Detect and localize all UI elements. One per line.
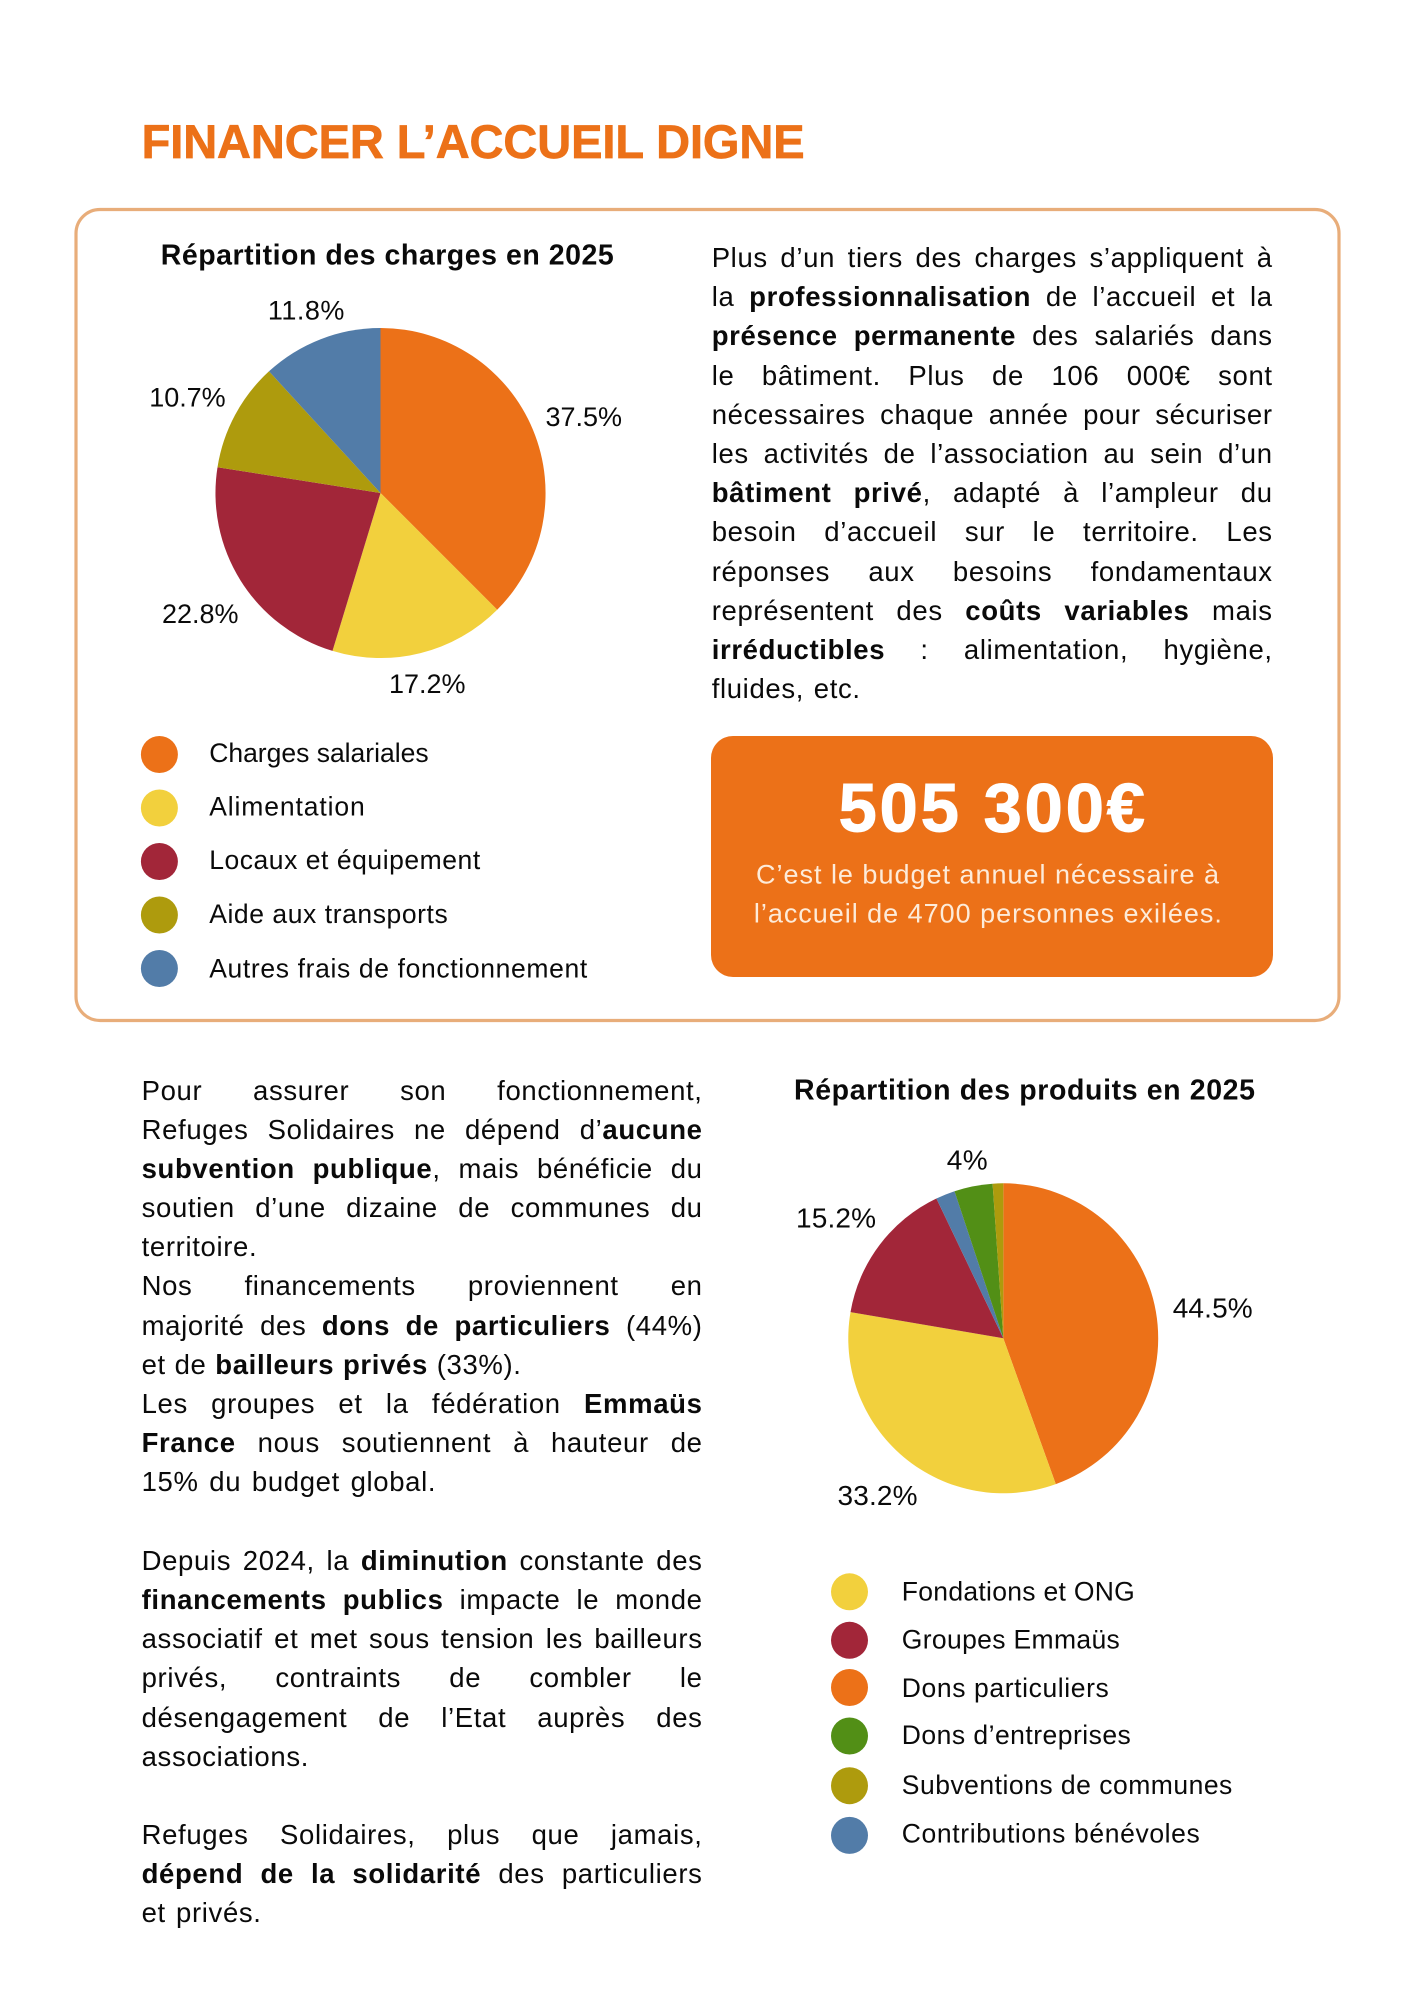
panel: charges frame: [76, 210, 1339, 1020]
legend text: dons d'entreprises: Dons d’entreprises: [902, 1720, 1131, 1750]
pie labels: charges: [149, 296, 622, 699]
text block: funding explanation: [142, 1074, 703, 1928]
slice: charges salariales 37.5%: [380, 328, 546, 610]
text block: funding explanation: 15% du budget global.: [142, 1466, 436, 1497]
text block: charges explanation: représentent des coûts variables mais: [712, 595, 1273, 626]
swatch: charges salariales: [141, 736, 178, 773]
text block: funding explanation: majorité des dons de particuliers (44%): [142, 1310, 703, 1341]
label 33.2%: 33.2%: [838, 1480, 918, 1511]
legend text: charges salariales: Charges salariales: [209, 738, 429, 768]
swatch: aide aux transports: [141, 896, 178, 934]
label 11.8%: 11.8%: [268, 296, 344, 326]
legend text: locaux et équipement: Locaux et équipement: [209, 845, 481, 875]
slice: dons particuliers 44.5%: [1003, 1183, 1158, 1484]
legend text: groupes Emmaüs: Groupes Emmaüs: [902, 1625, 1120, 1655]
text block: charges explanation: [712, 242, 1273, 704]
label 44.5%: 44.5%: [1173, 1292, 1253, 1323]
title: FINANCER L’ACCUEIL DIGNE: [142, 115, 805, 168]
swatch: dons particuliers: [831, 1669, 868, 1706]
text block: charges explanation: bâtiment privé, adapté à l’ampleur du: [712, 477, 1273, 508]
swatch: fondations et ONG: [831, 1573, 868, 1610]
slice: alimentation 17.2%: [332, 493, 497, 658]
slice: fondations et ONG 33.2%: [848, 1312, 1056, 1493]
text block: funding explanation: Les groupes et la fédération Emmaüs: [142, 1388, 703, 1419]
slice: locaux et équipement 22.8%: [215, 467, 380, 651]
text block: charges explanation: nécessaires chaque année pour sécuriser: [712, 399, 1273, 430]
text block: charges explanation: présence permanente des salariés dans: [712, 320, 1273, 351]
label 10.7%: 10.7%: [149, 382, 226, 412]
text block: funding explanation: Refuges Solidaires ne dépend d’aucune: [142, 1114, 703, 1145]
label 15.2%: 15.2%: [796, 1203, 876, 1234]
legend text: alimentation: Alimentation: [209, 792, 365, 822]
text block: charges explanation: Plus d’un tiers des charges s’appliquent à: [712, 242, 1273, 273]
label 17.2%: 17.2%: [389, 669, 466, 699]
text block: charges explanation: les activités de l’association au sein d’un: [712, 438, 1273, 469]
label 22.8%: 22.8%: [162, 599, 238, 629]
swatch: contributions bénévoles: [831, 1817, 868, 1854]
text block: funding explanation: soutien d’une dizaine de communes du: [142, 1192, 703, 1223]
legend text: dons particuliers: Dons particuliers: [902, 1673, 1109, 1703]
swatch: subventions de communes: [831, 1767, 868, 1804]
text block: funding explanation: France nous soutiennent à hauteur de: [142, 1427, 703, 1458]
text block: charges explanation: irréductibles : alimentation, hygiène,: [712, 634, 1273, 665]
swatch: alimentation: [141, 790, 178, 826]
text block: funding explanation: Nos financements proviennent en: [142, 1270, 703, 1301]
pie chart: produits: [848, 1183, 1158, 1493]
text block: funding explanation: Refuges Solidaires, plus que jamais,: [142, 1819, 703, 1850]
heading: produits chart: Répartition des produits en 2025: [794, 1074, 1255, 1106]
legend: charges: [141, 736, 588, 987]
callout background: [711, 736, 1273, 977]
pie labels: produits: [796, 1144, 1253, 1511]
text block: funding explanation: associatif et met sous tension les bailleurs: [142, 1623, 703, 1654]
slice: contributions bénévoles: [936, 1191, 1003, 1338]
text block: funding explanation: et privés.: [142, 1897, 262, 1928]
legend text: autres frais: Autres frais de fonctionnement: [209, 954, 588, 984]
legend: produits: [831, 1573, 1232, 1854]
text block: funding explanation: associations.: [142, 1741, 309, 1772]
text block: funding explanation: subvention publique, mais bénéficie du: [142, 1153, 703, 1184]
swatch: locaux et équipement: [141, 843, 178, 880]
slice: subventions de communes: [993, 1183, 1003, 1338]
slice: dons d'entreprises 4%: [954, 1184, 1003, 1338]
text block: funding explanation: dépend de la solidarité des particuliers: [142, 1858, 703, 1889]
big number: 505 300€: [838, 770, 1145, 846]
callout text line 1: C’est le budget annuel nécessaire à: [756, 860, 1220, 890]
text block: charges explanation: réponses aux besoins fondamentaux: [712, 556, 1273, 586]
legend text: subventions de communes: Subventions de communes: [902, 1770, 1232, 1800]
text block: charges explanation: la professionnalisation de l’accueil et la: [712, 281, 1273, 312]
text block: funding explanation: financements publics impacte le monde: [142, 1584, 703, 1615]
text block: funding explanation: privés, contraints de combler le: [142, 1662, 703, 1693]
slice: aide aux transports 10.7%: [218, 371, 380, 493]
swatch: groupes Emmaüs: [831, 1622, 868, 1659]
label 37.5%: 37.5%: [546, 402, 622, 432]
text block: charges explanation: besoin d’accueil sur le territoire. Les: [712, 516, 1273, 547]
text block: charges explanation: le bâtiment. Plus de 106 000€ sont: [712, 360, 1273, 391]
legend text: contributions bénévoles: Contributions bénévoles: [902, 1818, 1200, 1848]
text block: funding explanation: territoire.: [142, 1231, 257, 1262]
text block: funding explanation: Pour assurer son fonctionnement,: [142, 1074, 703, 1106]
slice: groupes Emmaüs 15.2%: [850, 1198, 1003, 1338]
slice: autres frais 11.8%: [269, 328, 380, 493]
text block: charges explanation: fluides, etc.: [712, 673, 861, 704]
text block: funding explanation: Depuis 2024, la diminution constante des: [142, 1545, 703, 1576]
text block: funding explanation: et de bailleurs privés (33%).: [142, 1349, 522, 1380]
text block: funding explanation: désengagement de l’Etat auprès des: [142, 1702, 703, 1732]
callout: annual budget: [711, 736, 1273, 977]
swatch: autres frais: [141, 950, 178, 987]
pie chart: charges: [215, 328, 546, 658]
label 4%: 4%: [947, 1144, 988, 1175]
callout text line 2: l’accueil de 4700 personnes exilées.: [754, 898, 1222, 928]
legend text: aide aux transports: Aide aux transports: [209, 899, 448, 929]
legend text: fondations et ONG: Fondations et ONG: [902, 1576, 1135, 1606]
heading: charges chart: Répartition des charges en 2025: [161, 240, 614, 272]
swatch: dons d'entreprises: [831, 1718, 868, 1754]
